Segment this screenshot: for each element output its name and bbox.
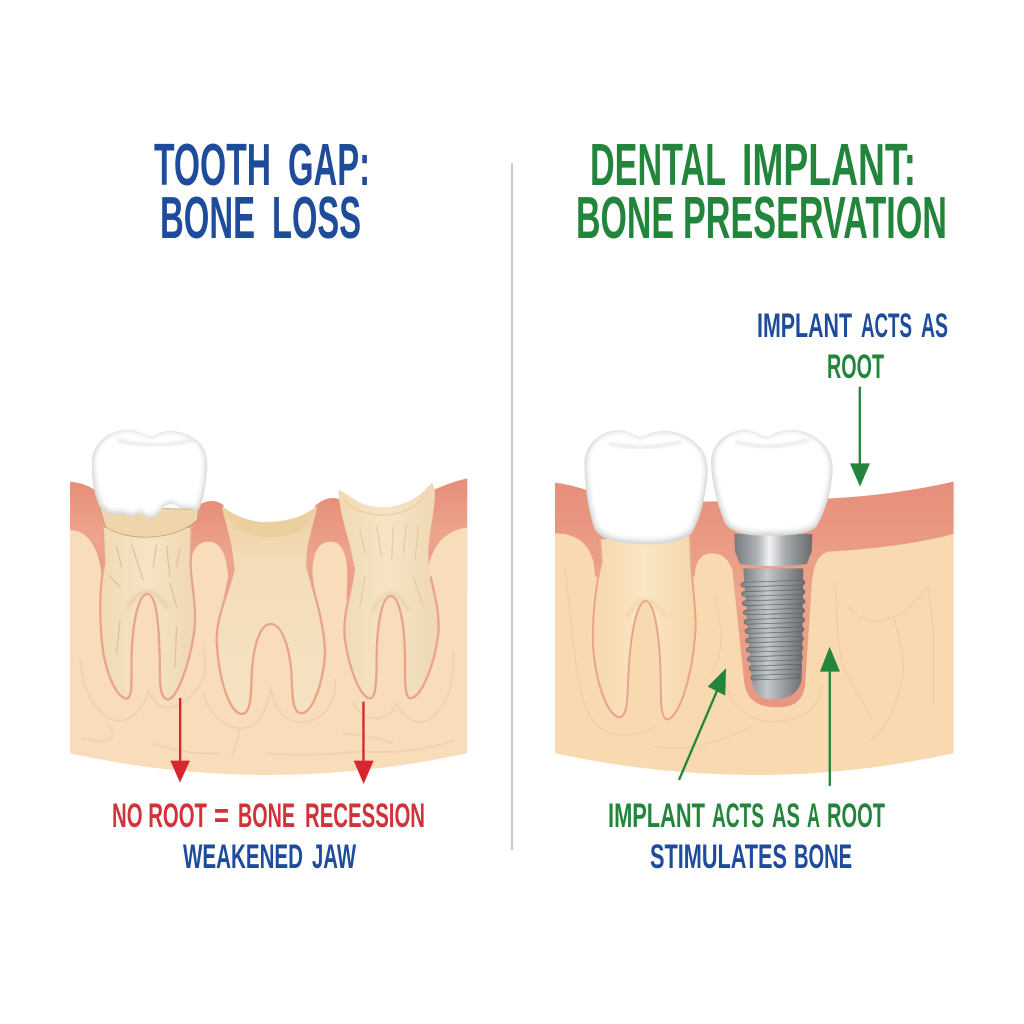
caption: stimulates bone: ACTS — [712, 797, 764, 835]
arrow: down right — [354, 702, 374, 784]
panel: tooth gap diagram — [70, 429, 467, 784]
tooth root: centre — [217, 506, 325, 714]
title: tooth gap: GAP: — [288, 132, 370, 198]
root texture: left — [110, 545, 180, 667]
caption: bone recession — [112, 797, 425, 876]
root outline: centre — [217, 563, 325, 714]
caption: stimulates bone: ROOT — [827, 797, 885, 835]
caption: bone recession: NO ROOT — [112, 797, 207, 835]
label: implant acts as root: ROOT — [827, 348, 884, 386]
caption: stimulates bone: STIMULATES — [650, 838, 787, 876]
arrow: diagonal to bone — [679, 668, 726, 780]
arrow: down left — [170, 698, 190, 783]
crown: left — [92, 429, 207, 519]
crown: natural tooth — [584, 430, 708, 544]
title: dental implant: BONE — [576, 185, 674, 251]
caption: bone recession: RECESSION — [305, 797, 425, 835]
gum: centre left — [187, 501, 238, 613]
label: implant acts as root — [757, 307, 948, 386]
root texture: right — [343, 492, 428, 610]
caption: stimulates bone: BONE — [794, 838, 852, 876]
title: dental implant: IMPLANT: — [742, 132, 916, 198]
tooth root — [593, 533, 696, 719]
caption: bone recession: WEAKENED — [183, 838, 303, 876]
bone texture — [565, 570, 933, 748]
caption: stimulates bone: IMPLANT — [608, 797, 705, 835]
label: implant acts as root: AS — [921, 307, 948, 345]
title: dental implant: DENTAL — [590, 132, 726, 198]
jaw bone — [70, 527, 467, 775]
root outline: right — [344, 567, 439, 698]
caption: stimulates bone: AS — [772, 797, 800, 835]
caption: stimulates bone: A — [807, 797, 820, 835]
crown: implant — [711, 429, 833, 536]
divider — [511, 163, 513, 850]
tooth root: left — [100, 527, 195, 699]
implant collar — [734, 534, 812, 566]
arrow: down to gum — [850, 387, 870, 487]
title: tooth gap: BONE — [160, 185, 255, 251]
gum: left — [70, 482, 107, 593]
implant threads — [741, 580, 805, 680]
caption: stimulates bone — [608, 797, 885, 876]
caption: bone recession: = — [214, 797, 229, 835]
bone texture — [80, 647, 454, 757]
title: dental implant — [576, 132, 947, 251]
tooth root: centre inner shade — [225, 510, 314, 537]
title: tooth gap: TOOTH — [154, 132, 271, 198]
tooth root: right — [338, 483, 439, 698]
implant body — [743, 568, 803, 699]
arrow: up to bone — [820, 647, 840, 786]
title: tooth gap — [154, 132, 370, 251]
label: implant acts as root: IMPLANT — [757, 307, 852, 345]
title: tooth gap: LOSS — [272, 185, 361, 251]
crown stump — [100, 507, 198, 537]
panel: dental implant diagram — [555, 387, 954, 786]
gum: right — [423, 478, 467, 593]
gum: centre right — [303, 498, 358, 613]
caption: bone recession: BONE — [238, 797, 295, 835]
gum band — [555, 482, 954, 707]
jaw bone — [555, 532, 954, 775]
label: implant acts as root: ACTS — [861, 307, 912, 345]
caption: bone recession: JAW — [312, 838, 357, 876]
root crotch shade — [627, 600, 665, 617]
